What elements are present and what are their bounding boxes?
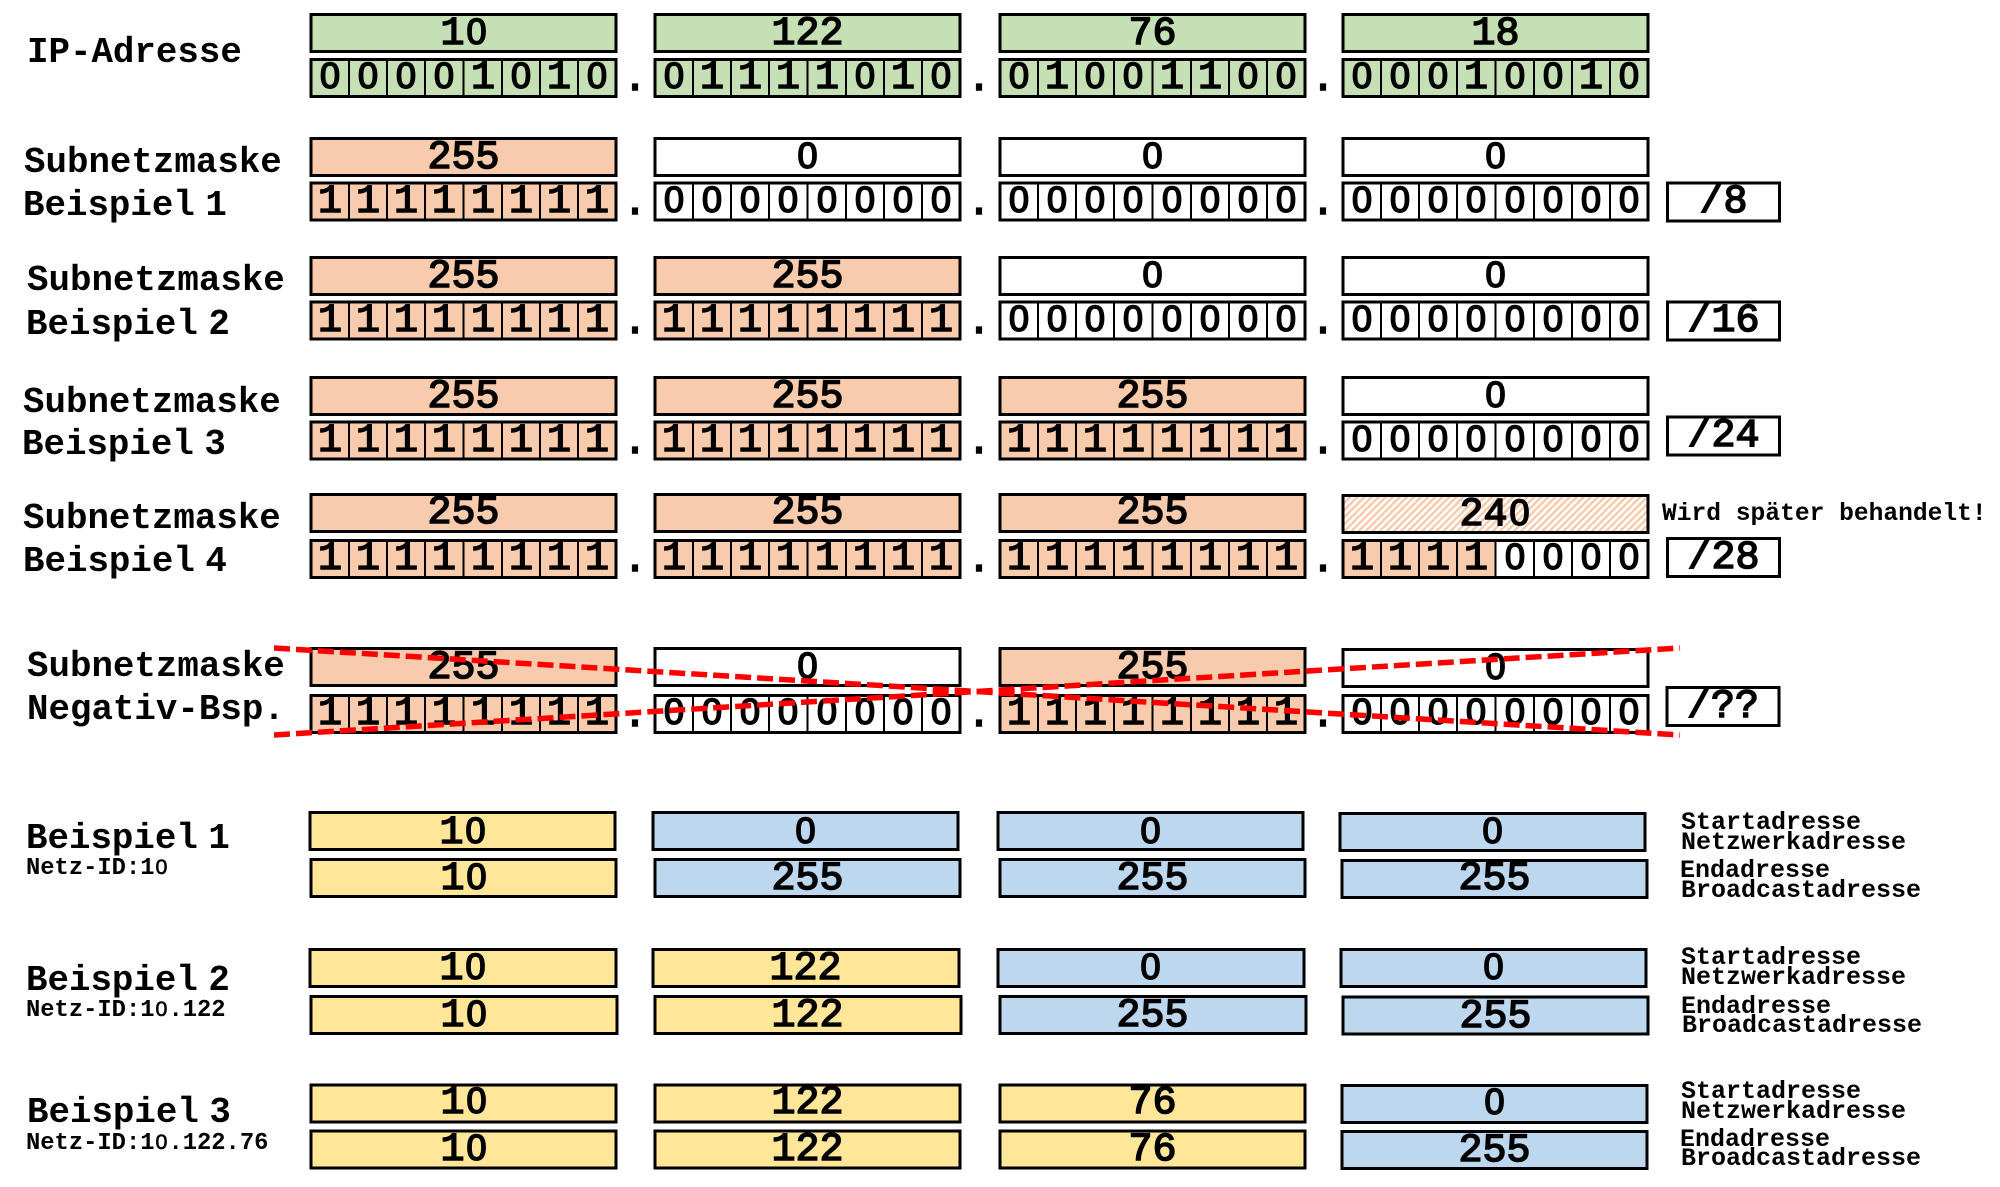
row: IP-Adresse: [27, 11, 1648, 103]
decimal octets: 0: [797, 645, 818, 686]
binary octets: .: [1311, 539, 1335, 584]
binary octets: 0 1111 0 1 0: [664, 55, 951, 101]
decimal octets: [311, 645, 1648, 691]
label: Beispiel 3, Netz-ID:10.122.76: Netz-ID:10.122.76: [26, 1130, 268, 1157]
end address: [311, 1127, 1647, 1174]
decimal octets: 0: [1142, 254, 1163, 295]
binary octets: 0 1 00 11 00: [1009, 55, 1296, 101]
binary octets: .: [1311, 182, 1335, 227]
address captions: Netzwerkadresse: [1681, 963, 1906, 992]
decimal octets: 255: [1116, 646, 1189, 691]
binary octets: 11111111: [318, 692, 609, 737]
row: Subnetzmaske Beispiel 1: [23, 135, 1780, 227]
address captions: [1681, 943, 1922, 1040]
decimal octets: 76: [1128, 12, 1177, 57]
address captions: Netzwerkadresse: [1681, 828, 1906, 857]
start address: 0: [1140, 810, 1161, 851]
binary octets: 11111111: [318, 537, 609, 582]
start address: 0: [1482, 810, 1503, 851]
binary octets: 11111111: [662, 419, 953, 464]
label: Beispiel 1, Netz-ID:10: Beispiel 1: [26, 818, 230, 859]
end address: 10: [440, 1127, 487, 1173]
row: Subnetzmaske Beispiel 2: [26, 254, 1780, 346]
binary octets: 00000000: [1352, 179, 1639, 220]
label: Beispiel 3, Netz-ID:10.122.76: Beispiel 3: [27, 1092, 231, 1133]
end address: [311, 993, 1648, 1040]
binary octets: [311, 536, 1648, 584]
start address: 122: [771, 1081, 844, 1126]
binary octets: .: [967, 301, 991, 346]
prefix /24: [1668, 414, 1780, 459]
binary octets: [311, 418, 1648, 466]
address range: Beispiel 1: [26, 808, 1921, 905]
label: Beispiel 1, Netz-ID:10: Netz-ID:10: [26, 855, 168, 882]
start address: 10: [439, 946, 486, 992]
start address: 10: [440, 1080, 487, 1126]
end address: 255: [1458, 1129, 1531, 1174]
prefix /28: [1668, 536, 1780, 581]
start address: 76: [1128, 1081, 1177, 1126]
row: Subnetzmaske Beispiel 3: [22, 374, 1780, 466]
end address: 10: [440, 856, 487, 902]
label: Subnetzmaske Negativ-Bsp.: [27, 646, 285, 730]
decimal octets: 0: [1485, 374, 1506, 415]
label: Subnetzmaske Beispiel 4: Subnetzmaske: [23, 498, 281, 539]
binary octets: .: [967, 539, 991, 584]
label: Subnetzmaske Negativ-Bsp.: Negativ-Bsp.: [27, 689, 285, 730]
prefix /??: [1667, 685, 1779, 730]
address captions: [1680, 808, 1921, 905]
decimal octets: 255: [771, 375, 844, 420]
row: Subnetzmaske Beispiel 4: [23, 491, 1987, 584]
decimal octets: 240: [1459, 492, 1530, 538]
label: Beispiel 1, Netz-ID:10: [26, 818, 230, 882]
label: Subnetzmaske Beispiel 4: [23, 498, 281, 582]
prefix /8: /8: [1699, 180, 1748, 225]
decimal octets: 255: [771, 255, 844, 300]
start address: [310, 946, 1646, 992]
binary octets: 11111111: [318, 419, 609, 464]
binary octets: [311, 691, 1648, 739]
address captions: Broadcastadresse: [1682, 1011, 1922, 1040]
end address: 255: [1458, 857, 1531, 902]
binary octets: 1111 0000: [1350, 536, 1639, 582]
start address: 0: [795, 810, 816, 851]
decimal octets: 0: [1142, 135, 1163, 176]
end address: 255: [1459, 995, 1532, 1040]
row: Subnetzmaske Negativ-Beispiel: [27, 645, 1779, 739]
binary octets: 11111111: [318, 180, 609, 225]
binary octets: 000 1 00 1 0: [1352, 55, 1639, 101]
label: Subnetzmaske Beispiel 2: Subnetzmaske: [27, 260, 285, 301]
binary octets: 00000000: [1009, 179, 1296, 220]
start address: 0: [1483, 946, 1504, 987]
decimal octets: 255: [1116, 491, 1189, 536]
address captions: Broadcastadresse: [1681, 876, 1921, 905]
label: Subnetzmaske Beispiel 3: Beispiel 3: [22, 424, 226, 465]
end address: 76: [1128, 1128, 1177, 1173]
binary octets: .: [1311, 421, 1335, 466]
address captions: Endadresse: [1680, 1125, 1830, 1154]
binary octets: 00000000: [664, 179, 951, 220]
prefix /8: [1668, 180, 1780, 225]
decimal octets: [311, 11, 1648, 57]
binary octets: [311, 298, 1648, 346]
binary octets: 11111111: [1007, 692, 1298, 737]
decimal octets: 0: [797, 135, 818, 176]
label: Subnetzmaske Beispiel 1: Subnetzmaske: [24, 142, 282, 183]
decimal octets: 0: [1485, 254, 1506, 295]
address captions: Startadresse: [1681, 808, 1861, 837]
address captions: [1680, 1077, 1921, 1173]
decimal octets: 255: [427, 255, 500, 300]
end address: 255: [1116, 994, 1189, 1039]
label: Subnetzmaske Beispiel 1: [23, 142, 282, 226]
binary octets: .: [1311, 694, 1335, 739]
binary octets: 11111111: [318, 299, 609, 344]
label: Subnetzmaske Beispiel 1: Beispiel 1: [23, 185, 227, 226]
end address: [311, 856, 1647, 902]
label: Subnetzmaske Beispiel 3: Subnetzmaske: [23, 382, 281, 423]
decimal octets: [311, 374, 1648, 420]
decimal octets: 0: [1485, 135, 1506, 176]
label: Beispiel 2, Netz-ID:10.122: [26, 960, 230, 1024]
binary octets: .: [967, 182, 991, 227]
decimal octets: 255: [427, 646, 500, 691]
label: Beispiel 3, Netz-ID:10.122.76: [26, 1092, 268, 1157]
binary octets: .: [623, 421, 647, 466]
label: Subnetzmaske Beispiel 3: [22, 382, 281, 465]
start address: 0: [1140, 946, 1161, 987]
address range: Beispiel 2: [26, 943, 1922, 1040]
label: Subnetzmaske Negativ-Bsp.: Subnetzmaske: [27, 646, 285, 687]
label: IP-Adresse: IP-Adresse: [27, 32, 242, 73]
decimal octets: 0: [1485, 646, 1506, 687]
start address: 10: [439, 810, 486, 856]
label: Beispiel 2, Netz-ID:10.122: Netz-ID:10.122: [26, 997, 226, 1024]
binary octets: .: [967, 58, 991, 103]
binary octets: 11111111: [1007, 419, 1298, 464]
binary octets: .: [1311, 301, 1335, 346]
decimal octets: [311, 135, 1648, 181]
start address: 122: [769, 947, 842, 992]
end address: 122: [771, 1128, 844, 1173]
label: Subnetzmaske Beispiel 4: Beispiel 4: [23, 541, 227, 582]
binary octets: .: [623, 694, 647, 739]
binary octets: [311, 179, 1648, 227]
decimal octets: 18: [1471, 12, 1520, 57]
prefix /24: /24: [1687, 414, 1760, 459]
prefix /16: /16: [1687, 299, 1760, 344]
binary octets: 00000000: [664, 691, 951, 732]
binary octets: 00000000: [1352, 418, 1639, 459]
address range: Beispiel 3: [26, 1077, 1921, 1174]
decimal octets: 255: [1116, 375, 1189, 420]
decimal octets: [311, 491, 1648, 538]
label: Subnetzmaske Beispiel 2: [26, 260, 285, 345]
binary octets: .: [623, 301, 647, 346]
binary octets: 11111111: [662, 299, 953, 344]
label: Subnetzmaske Beispiel 2: Beispiel 2: [26, 304, 230, 345]
address captions: Netzwerkadresse: [1681, 1097, 1906, 1126]
binary octets: 0000 1 0 1 0: [320, 55, 607, 101]
binary octets: .: [967, 421, 991, 466]
prefix /16: [1668, 299, 1780, 344]
address captions: Broadcastadresse: [1681, 1144, 1921, 1173]
decimal octets: [311, 254, 1648, 300]
end address: 255: [1116, 857, 1189, 902]
decimal octets: 255: [427, 375, 500, 420]
binary octets: 11111111: [1007, 537, 1298, 582]
address captions: Endadresse: [1680, 856, 1830, 885]
binary octets: 00000000: [1352, 691, 1639, 732]
binary octets: .: [623, 539, 647, 584]
end address: 122: [771, 994, 844, 1039]
address captions: Startadresse: [1681, 1077, 1861, 1106]
decimal octets: 122: [771, 12, 844, 57]
prefix /??: /??: [1687, 685, 1759, 730]
note: Wird später behandelt!: Wird später behandelt!: [1662, 501, 1987, 528]
decimal octets: 255: [427, 136, 500, 181]
decimal octets: 255: [771, 491, 844, 536]
label: Beispiel 2, Netz-ID:10.122: Beispiel 2: [26, 960, 230, 1001]
start address: 0: [1484, 1081, 1505, 1122]
red dashed cross-out: [274, 648, 1680, 735]
binary octets: .: [623, 182, 647, 227]
binary octets: 00000000: [1009, 298, 1296, 339]
address captions: Endadresse: [1681, 992, 1831, 1021]
prefix /28: /28: [1687, 536, 1760, 581]
start address: [310, 810, 1645, 856]
end address: 255: [771, 857, 844, 902]
address captions: Startadresse: [1681, 943, 1861, 972]
binary octets: .: [967, 694, 991, 739]
end address: 10: [440, 993, 487, 1039]
binary octets: 00000000: [1352, 298, 1639, 339]
start address: [311, 1080, 1647, 1126]
decimal octets: 10: [440, 11, 487, 57]
binary octets: [311, 55, 1648, 103]
binary octets: .: [1311, 58, 1335, 103]
binary octets: 11111111: [662, 537, 953, 582]
binary octets: .: [623, 58, 647, 103]
decimal octets: 255: [427, 491, 500, 536]
